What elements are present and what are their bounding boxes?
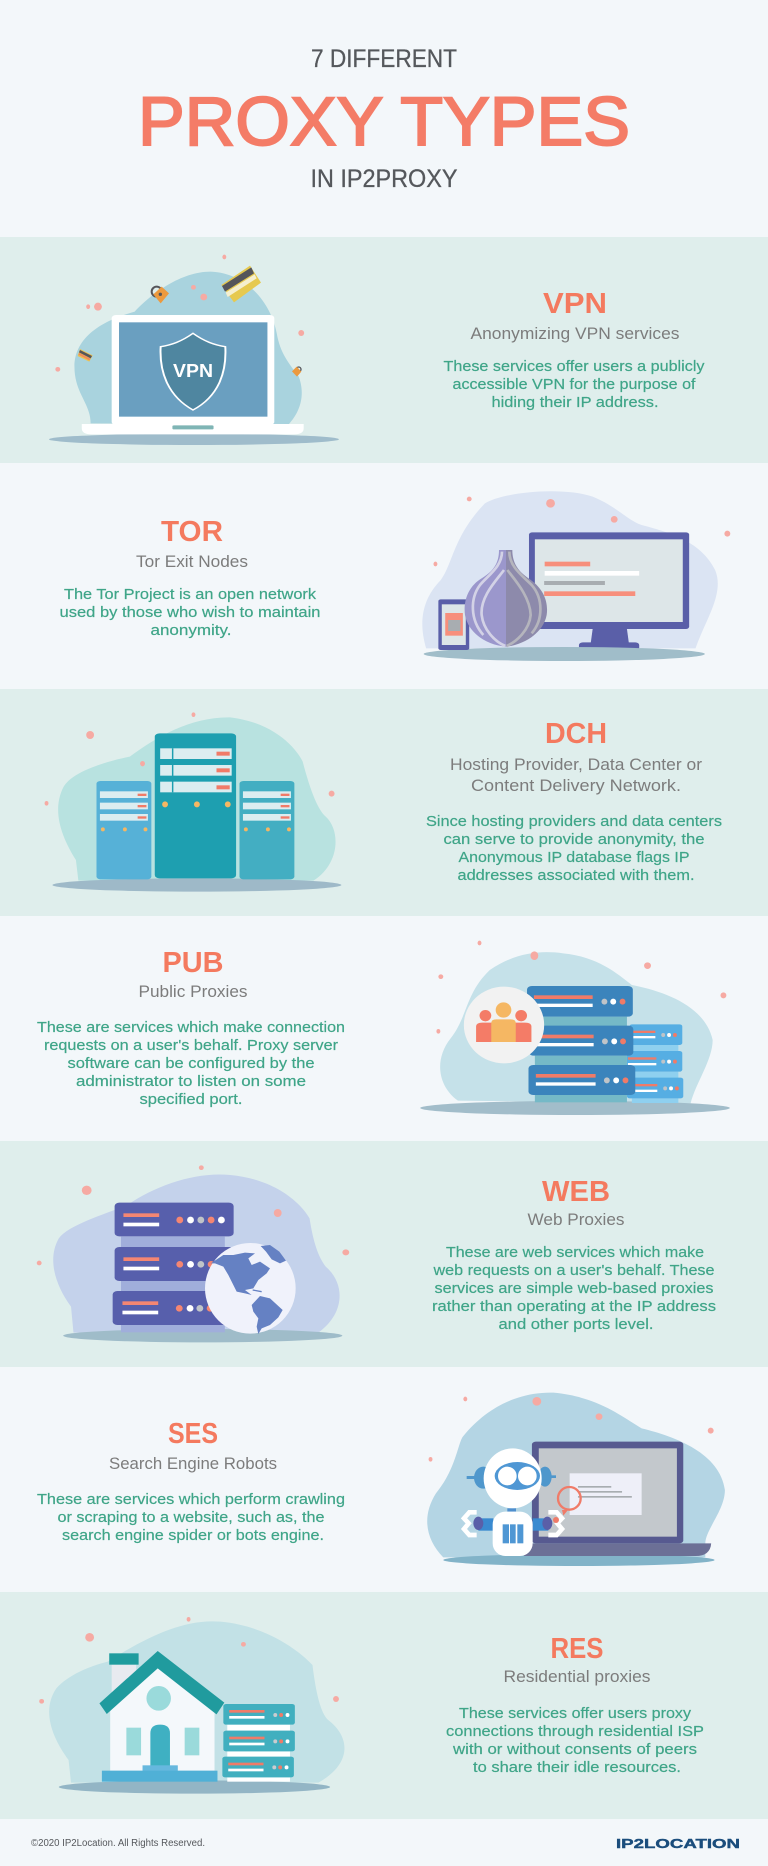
- description: RES: [446, 1705, 704, 1776]
- description: DCH: can serve to provide anonymity, the: [444, 831, 704, 848]
- panel: PUB: [0, 916, 768, 1141]
- subtitle: DCH: Hosting Provider, Data Center or: [450, 755, 702, 774]
- subtitle: PUB: Public Proxies: [138, 982, 248, 1001]
- heading: DCH: DCH: [545, 718, 607, 750]
- heading: PUB: PUB: [162, 947, 224, 979]
- subtitle: DCH: [450, 755, 702, 795]
- description: SES: search engine spider or bots engine.: [62, 1527, 324, 1544]
- heading: SES: SES: [168, 1418, 218, 1450]
- illustration: laptop with VPN shield: VPN: [173, 361, 213, 381]
- panel: WEB: [0, 1141, 768, 1367]
- subtitle: DCH: Content Delivery Network.: [471, 776, 681, 795]
- logo: IP2LOCATION: IP2LOCATION: [616, 1836, 740, 1851]
- subtitle: RES: Residential proxies: [504, 1667, 650, 1686]
- heading: RES: RES: [550, 1633, 604, 1665]
- description: WEB: [432, 1244, 716, 1333]
- icon: robot: [464, 1448, 581, 1556]
- illustration: data center servers: [45, 712, 341, 892]
- description: DCH: addresses associated with them.: [458, 867, 694, 884]
- description: DCH: Anonymous IP database flags IP: [458, 849, 690, 866]
- subtitle: WEB: Web Proxies: [528, 1210, 624, 1229]
- illustration: laptop with VPN shield: [49, 255, 339, 445]
- description: VPN: These services offer users a publicly: [444, 358, 705, 375]
- description: RES: with or without consents of peers: [452, 1741, 697, 1758]
- description: WEB: web requests on a user's behalf. These: [432, 1262, 714, 1279]
- description: PUB: administrator to listen on some: [76, 1073, 306, 1090]
- description: TOR: anonymity.: [150, 622, 232, 639]
- description: TOR: The Tor Project is an open network: [64, 586, 317, 603]
- description: SES: or scraping to a website, such as, the: [58, 1509, 324, 1526]
- description: PUB: requests on a user's behalf. Proxy server: [44, 1037, 338, 1054]
- illustration: servers with globe: [37, 1165, 349, 1342]
- heading: VPN: VPN: [543, 288, 607, 320]
- description: DCH: Since hosting providers and data centers: [426, 813, 722, 830]
- description: VPN: accessible VPN for the purpose of: [452, 376, 696, 393]
- title: [138, 45, 630, 193]
- heading: TOR: TOR: [161, 516, 223, 548]
- illustration: robot and laptop: [427, 1393, 725, 1566]
- description: PUB: software can be configured by the: [68, 1055, 314, 1072]
- description: RES: These services offer users proxy: [459, 1705, 692, 1722]
- subtitle: VPN: Anonymizing VPN services: [470, 324, 680, 343]
- subtitle: SES: Search Engine Robots: [109, 1454, 277, 1473]
- footer copyright: ©2020 IP2Location. All Rights Reserved.: [31, 1838, 205, 1849]
- description: WEB: rather than operating at the IP address: [432, 1298, 716, 1315]
- illustration: public proxy servers with users: [420, 941, 730, 1115]
- description: SES: [37, 1491, 345, 1544]
- heading: WEB: WEB: [542, 1176, 610, 1208]
- subtitle: TOR: Tor Exit Nodes: [136, 552, 248, 571]
- description: PUB: specified port.: [140, 1091, 242, 1108]
- description: SES: These are services which perform crawling: [37, 1491, 345, 1508]
- description: DCH: [426, 813, 722, 884]
- icon: globe: [205, 1243, 296, 1334]
- panel: DCH: [0, 689, 768, 916]
- description: VPN: [444, 358, 705, 411]
- panel: SES: [0, 1367, 768, 1592]
- icon: onion: [465, 550, 547, 647]
- description: TOR: used by those who wish to maintain: [60, 604, 320, 621]
- panel: RES: [0, 1592, 768, 1819]
- panel: TOR: [0, 463, 768, 689]
- description: WEB: These are web services which make: [446, 1244, 704, 1261]
- icon: card and locks: [78, 266, 301, 377]
- description: RES: to share their idle resources.: [473, 1759, 681, 1776]
- description: PUB: [37, 1019, 345, 1108]
- title: 7 DIFFERENT: [311, 45, 457, 73]
- illustration: house with servers: [39, 1617, 344, 1794]
- illustration: onion, monitor and phone: [422, 491, 730, 661]
- panel: VPN: [0, 237, 768, 463]
- description: VPN: hiding their IP address.: [492, 394, 658, 411]
- description: PUB: These are services which make connection: [37, 1019, 345, 1036]
- description: TOR: [60, 586, 320, 639]
- description: WEB: services are simple web-based proxies: [434, 1280, 714, 1297]
- title: IN IP2PROXY: [310, 165, 458, 193]
- description: WEB: and other ports level.: [498, 1316, 654, 1333]
- description: RES: connections through residential ISP: [446, 1723, 704, 1740]
- title: PROXY TYPES: [138, 83, 630, 160]
